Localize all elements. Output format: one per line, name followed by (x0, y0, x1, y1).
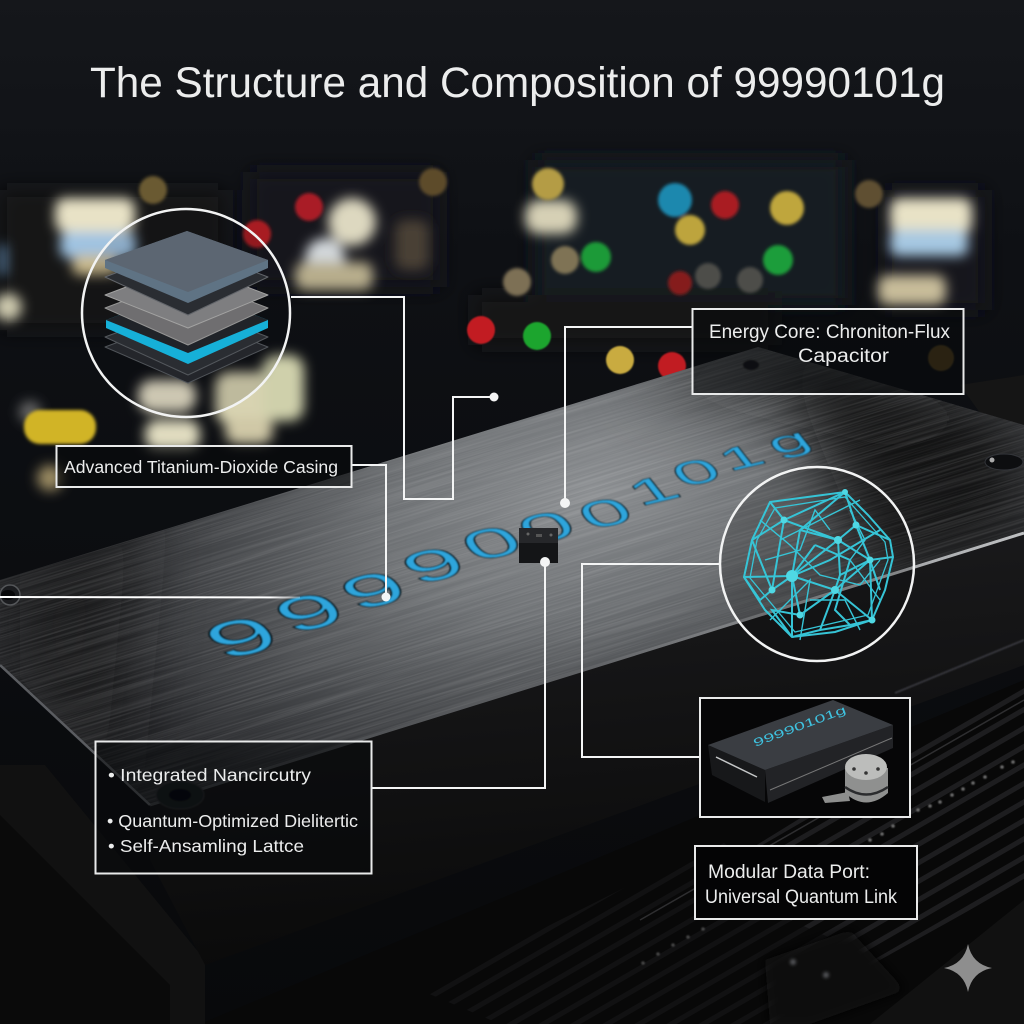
label: casing: Advanced Titanium-Dioxide Casing (64, 457, 338, 477)
module body (708, 700, 893, 803)
label: feature list (96, 742, 372, 874)
engraved serial number on plate: 0 (567, 489, 644, 538)
engraved serial number on plate: 9 (260, 581, 359, 643)
icon: sparkle watermark (944, 944, 992, 992)
connector: lattice to data port (582, 564, 720, 757)
engraved serial number on plate: g (757, 422, 819, 461)
label: energy core: Capacitor (798, 346, 890, 367)
plate screws (0, 360, 1023, 809)
layer stack icon (105, 231, 268, 383)
quantum link connector (822, 754, 888, 803)
connector: energy core to plate (560, 327, 692, 508)
engraved serial number on plate: 0 (506, 502, 587, 553)
side face lower highlight (895, 640, 1024, 693)
plate edge highlights (0, 533, 1024, 805)
label: modular data port: Universal Quantum Link (705, 887, 897, 908)
engraved serial number on plate: 0 (449, 516, 534, 570)
engraved serial number on plate: 9 (389, 537, 478, 593)
title: The Structure and Composition of 99990101g (90, 59, 945, 107)
fin highlight dots (641, 760, 1015, 965)
main device top plate (0, 340, 1024, 820)
engraved serial number on plate: 1 (709, 437, 774, 478)
engraved serial number on plate: 1 (617, 467, 690, 513)
lower body and heat-sink fins (0, 680, 1024, 1024)
callout circle: lattice (720, 467, 914, 661)
connector: chip to feature list (372, 557, 550, 788)
engraved serial number on plate (190, 422, 819, 670)
connector: casing layers circle to upper dot (291, 297, 498, 499)
engraved serial number on plate: 9 (327, 561, 420, 620)
wireframe lattice icon (744, 492, 893, 640)
label: casing (56, 446, 352, 487)
label: energy core (692, 309, 964, 394)
callout circle: casing layers (82, 209, 290, 417)
small black chip on plate (519, 528, 558, 563)
connector: casing label to digit (352, 465, 390, 602)
connector: left horizontal line (0, 596, 300, 598)
engraved serial number on plate: 0 (662, 451, 731, 494)
device side face (150, 533, 1024, 965)
label: modular data port: Modular Data Port: (708, 862, 870, 883)
engraved serial number on plate: 9 (190, 604, 294, 670)
label: modular data port (695, 846, 917, 919)
label: energy core: Energy Core: Chroniton-Flux (709, 322, 950, 343)
label: feature list: • Quantum-Optimized Dielitertic (107, 811, 358, 831)
module body: 99990101g (752, 704, 848, 750)
label: feature list: • Self-Ansamling Lattce (108, 836, 304, 856)
label: feature list: • Integrated Nancircutry (108, 765, 311, 785)
data port image panel (700, 698, 910, 817)
